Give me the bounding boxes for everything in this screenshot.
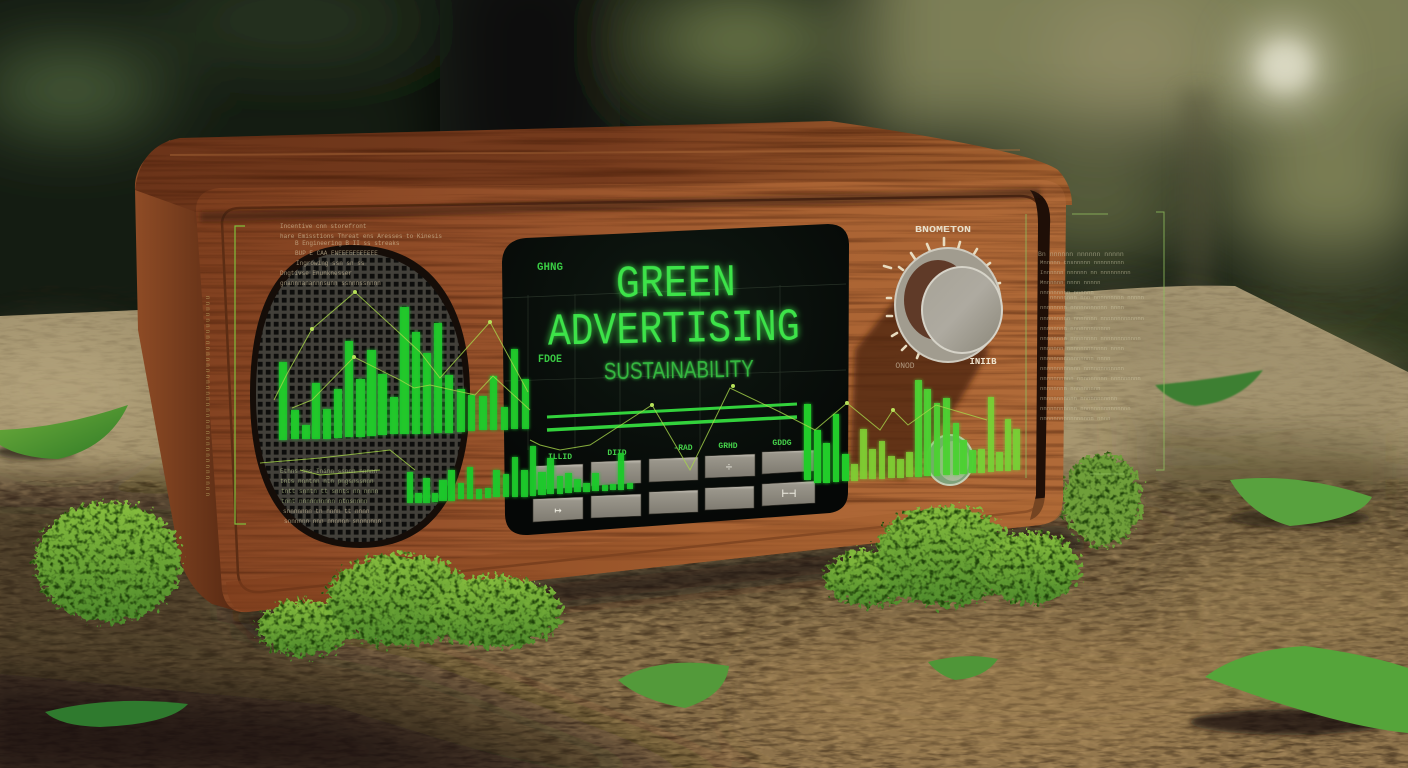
right data text block: nnnnnnnnnnn nnnnnnnnnnn bbox=[1040, 395, 1117, 402]
knob barrel bbox=[904, 260, 972, 340]
right data text block: nnnnnnn nnnnnnnnnnnn nnnn bbox=[1040, 345, 1124, 352]
right data text block: nnnnnnnnnnnnnnnn nnnn bbox=[1040, 415, 1110, 422]
lower front lip bbox=[226, 496, 1062, 612]
right data text block: nnnnnnnnn nnnnnn bbox=[1040, 289, 1094, 296]
leaf: right middle bbox=[1230, 478, 1372, 528]
right data text block: nnnnnnnn nnnnnnnnnnn nnnn bbox=[1040, 304, 1124, 311]
left data text block: hare Emisstions Threat ens Aresses to Kinesis bbox=[280, 233, 442, 240]
button glyphs: ↦ bbox=[554, 504, 562, 518]
right data text block: nnnnnnnnnnnn nnnnnnnnnnnn bbox=[1040, 365, 1124, 372]
left data text block: snnnnnn nnn nnnnnn snnnnnnn bbox=[284, 518, 382, 525]
radio body bbox=[130, 118, 1075, 618]
title: advertising: ADVERTISING bbox=[547, 302, 800, 359]
leaf: far left bbox=[0, 405, 128, 460]
button labels: GRHD bbox=[718, 442, 738, 451]
left data text block: tnts nnntnn ntn pngsnssnnn bbox=[280, 478, 374, 485]
moss: front centre left bbox=[257, 554, 563, 656]
button glyphs: ÷ bbox=[725, 461, 733, 475]
leaf: bottom centre bbox=[618, 663, 729, 708]
right data text block: nnnnnnnnnnn nnnnnnnnnnnnnnn bbox=[1040, 405, 1131, 412]
volume knob bbox=[850, 225, 1002, 480]
leaf: bottom left bbox=[45, 701, 188, 727]
subtitle: sustainability: SUSTAINABILITY bbox=[604, 355, 754, 386]
right data text block: Mnnnnnn nnnn nnnnn bbox=[1040, 279, 1100, 286]
knob shadow bbox=[850, 300, 990, 480]
left vertical tick column: nnnnnnnnnnnnnnnnnnnnnnnnnnnnnnnnnnnn bbox=[204, 296, 210, 496]
knob label top: BNOMETON bbox=[915, 225, 971, 235]
radio front face bbox=[190, 178, 1070, 618]
front recess groove bbox=[222, 196, 1042, 592]
screen label top: GHNG bbox=[537, 262, 563, 274]
knob cap bbox=[922, 267, 1002, 353]
display screen bbox=[502, 224, 849, 535]
moss: left bbox=[34, 502, 182, 622]
knob label left: ONOD bbox=[895, 362, 915, 371]
left data text block: Ethns sns Ininn ssnnn nnnnn bbox=[280, 468, 378, 475]
button labels: ILLID bbox=[548, 453, 572, 462]
button glyphs bbox=[554, 461, 796, 518]
left data text block: snnnnnnn tn nnnn tt nnnn bbox=[283, 508, 370, 515]
wooden table surface bbox=[0, 286, 1408, 768]
radio top bbox=[130, 118, 1075, 214]
screen label middle: FDOE bbox=[538, 354, 562, 366]
moss: behind right of radio bbox=[1062, 454, 1142, 546]
right dark groove bbox=[1030, 190, 1050, 520]
leaf: small centre right bbox=[928, 656, 998, 680]
chart: right bars bbox=[804, 380, 1020, 483]
left data text block: Incentive cnn storefront bbox=[280, 223, 366, 230]
leaves on table bbox=[0, 370, 1408, 735]
right data text block: nnnnnnnnnn nnnnnnnnn nnnnnnnnn bbox=[1040, 375, 1141, 382]
right data text block: nnnnnnnn nnnnnnnn nnnnnnnnnnnn bbox=[1040, 335, 1141, 342]
button labels: DIID bbox=[607, 449, 627, 458]
knob base ring bbox=[895, 248, 1001, 362]
screen grid lines bbox=[503, 284, 846, 450]
chart: lower middle bars bbox=[407, 446, 633, 503]
right data text block: nnnnnnnn nnnnnnnnn bbox=[1040, 385, 1100, 392]
tick marks bbox=[884, 238, 1000, 358]
button labels bbox=[548, 439, 792, 462]
leaf: right rear bbox=[1155, 370, 1263, 406]
small lower knob bbox=[927, 435, 973, 485]
right data text block: nnnnnnnnnnnnnnnn nnnn bbox=[1040, 355, 1110, 362]
moss: front centre right bbox=[824, 506, 1080, 606]
line markers bbox=[310, 290, 895, 412]
top recess shadow bbox=[200, 188, 1040, 222]
button labels: -RAD bbox=[673, 444, 693, 453]
left bracket bbox=[235, 226, 246, 524]
right data text block bbox=[1038, 251, 1144, 422]
leaf: bottom right bbox=[1190, 646, 1408, 735]
right data text block: nnnnnnnn nnn nnnnnnnnn nnnnn bbox=[1050, 294, 1144, 301]
knob label right: INIIB bbox=[969, 357, 997, 367]
right data text block: Innnnnn nnnnnn nn nnnnnnnnn bbox=[1040, 269, 1131, 276]
right data text block: nnnnnnnn nnnnnnnnnnnn bbox=[1040, 325, 1110, 332]
button labels: GDDG bbox=[772, 439, 792, 448]
right data text block: Mnnnnn tnsnnnnn nnnnnnnnn bbox=[1040, 259, 1124, 266]
left data text block bbox=[280, 223, 442, 525]
left data text block: BUP E CAA ENEEEEEEEEEEE bbox=[295, 250, 378, 257]
blurred forest background bbox=[0, 0, 1408, 390]
line overlay: trends bbox=[260, 292, 987, 475]
chart: speaker bars bbox=[279, 307, 529, 440]
left data text block: B Engineering B II ss streaks bbox=[295, 240, 400, 247]
title: green: GREEN bbox=[615, 258, 736, 311]
right data text block: nnnnnnnnn nnnnnnn nnnnnnnnnnnnn bbox=[1040, 315, 1144, 322]
left data text block: Ingrowing ssn sn ss bbox=[296, 260, 365, 267]
right bracket panel bbox=[1026, 212, 1164, 478]
button glyphs: ⊢⊣ bbox=[782, 487, 796, 501]
screen progress bars bbox=[547, 404, 797, 430]
right data text block: Bn nnnnnn nnnnnn nnnnn bbox=[1038, 251, 1124, 258]
screen buttons bbox=[533, 450, 815, 522]
left data text block: tntt snntn tt snnts nn nnnn bbox=[281, 488, 379, 495]
radio left side bbox=[135, 140, 240, 612]
left data text block: tnnt nnnnnnnnnn ntnsnnnn bbox=[281, 498, 368, 505]
speaker grille bbox=[250, 245, 470, 548]
left data text block: Dngtivse Enunknesser bbox=[280, 270, 352, 277]
left data text block: gnannnanannnsunn ssnnnssnnnn bbox=[280, 280, 381, 287]
